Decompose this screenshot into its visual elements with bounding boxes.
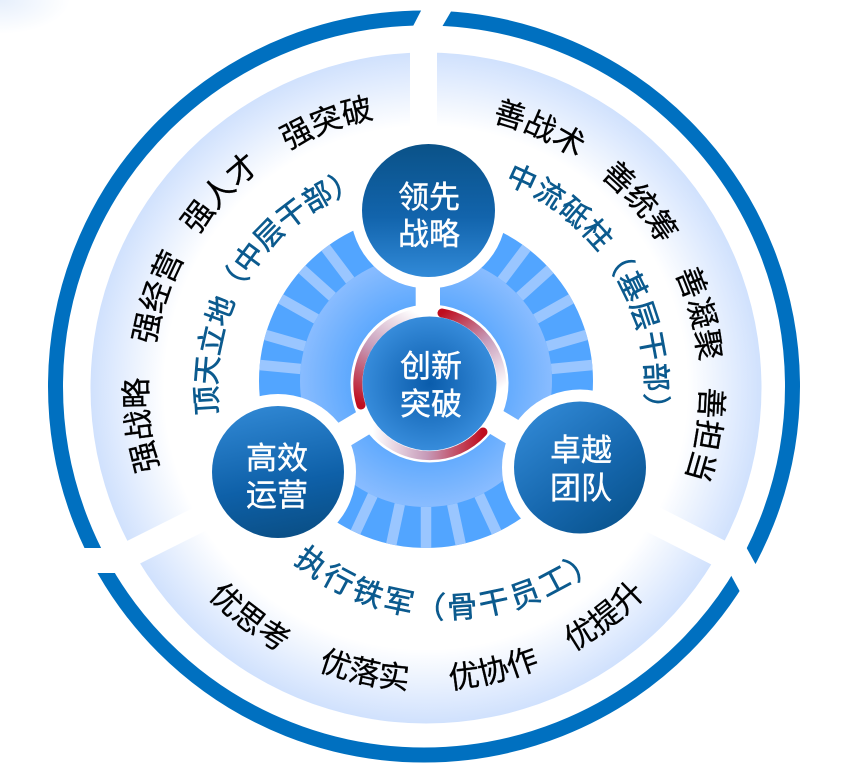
text: 强人才: 强人才 — [178, 154, 254, 234]
circle: 领先战略: 战略 — [398, 217, 460, 252]
center: 创新突破 with red arcs — [350, 304, 508, 462]
label: 中流砥柱（基层干部）: 中流砥柱（基层干部） — [508, 165, 672, 404]
circle: 领先战略: 领先 — [398, 180, 460, 215]
text: 优提升: 优提升 — [566, 582, 642, 652]
circle: 高效运营: 运营 — [246, 478, 308, 513]
circle: 卓越团队: 团队 — [550, 471, 612, 506]
text: 善凝聚: 善凝聚 — [675, 266, 723, 361]
text: 强战略: 强战略 — [120, 378, 160, 474]
text: 善战术: 善战术 — [496, 98, 584, 156]
text: 优落实: 优落实 — [322, 648, 408, 692]
center: 创新突破 with red arcs: 创新 — [400, 349, 462, 384]
circle: 高效运营 — [200, 394, 356, 550]
label: 顶天立地（中层干部）: 顶天立地（中层干部） — [192, 174, 341, 415]
circle: 卓越团队: 卓越 — [550, 433, 612, 468]
circle: 卓越团队 — [502, 390, 658, 546]
text: 善担当: 善担当 — [684, 388, 727, 482]
text: 强经营: 强经营 — [130, 248, 184, 342]
center: 创新突破 with red arcs: 突破 — [400, 387, 462, 422]
text: 优协作: 优协作 — [449, 648, 538, 691]
panel: three outer segments — [90, 45, 762, 724]
label: 执行铁军（骨干员工）: 执行铁军（骨干员工） — [294, 544, 580, 622]
text: 优思考: 优思考 — [210, 583, 291, 650]
inner fan with tiles — [260, 234, 592, 548]
circle: 领先战略 — [350, 132, 506, 288]
text: 强突破: 强突破 — [278, 94, 374, 150]
text: 善统筹: 善统筹 — [602, 160, 680, 240]
background corner tint — [0, 0, 70, 34]
circle: 高效运营: 高效 — [246, 441, 308, 476]
